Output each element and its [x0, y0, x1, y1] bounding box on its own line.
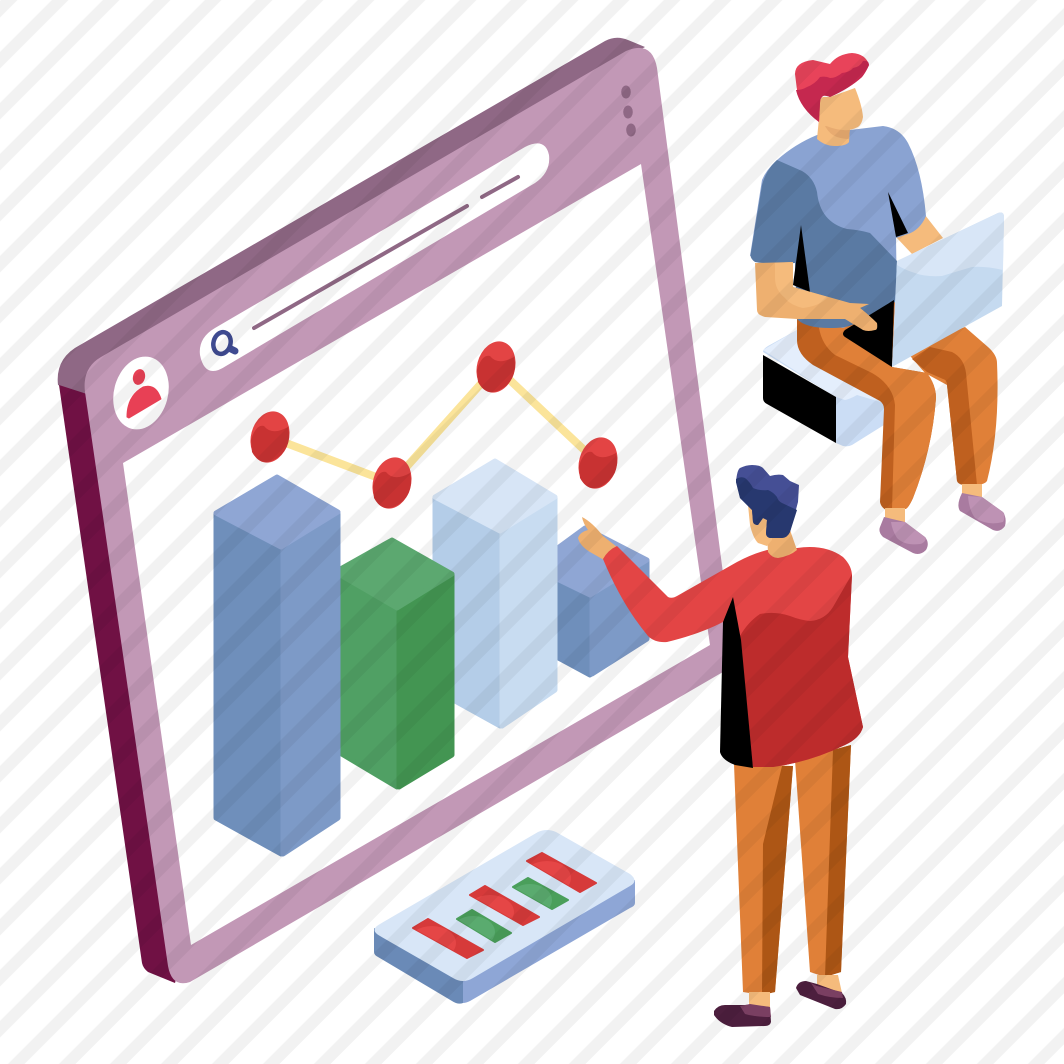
laptop screen — [892, 212, 1004, 367]
front shoe — [879, 517, 928, 554]
device left side — [374, 928, 463, 1004]
standing man pointing — [578, 465, 863, 1027]
window front frame — [85, 48, 735, 983]
data point 3 — [471, 337, 521, 397]
bar 3 — [435, 461, 555, 726]
right leg — [795, 745, 851, 977]
near arm — [755, 262, 877, 331]
sweater shade — [740, 574, 863, 767]
search bar — [200, 143, 549, 371]
window left depth — [59, 385, 178, 983]
laptop hand over keyboard — [850, 308, 877, 331]
front sock — [885, 508, 905, 526]
seated man with laptop — [750, 53, 1006, 554]
right shoe — [796, 981, 846, 1009]
seat cube — [763, 330, 890, 446]
neck — [767, 530, 797, 558]
hair — [736, 465, 799, 538]
bar 2 — [335, 540, 452, 787]
data point 2 — [367, 453, 417, 513]
left leg — [734, 764, 793, 995]
socks — [749, 975, 842, 1008]
back shoe — [958, 493, 1006, 531]
sweater black fold — [720, 597, 753, 768]
neck — [817, 118, 850, 146]
bar 4 — [553, 528, 647, 675]
left shoe — [714, 1005, 771, 1027]
device key bars — [408, 853, 596, 960]
back leg — [905, 327, 1006, 531]
window top depth — [58, 38, 645, 396]
icon: user avatar — [105, 350, 177, 436]
torso tee shirt — [750, 126, 926, 328]
face — [819, 88, 863, 130]
keyboard device — [374, 830, 635, 1004]
window content area — [123, 164, 710, 945]
browser window — [58, 38, 735, 983]
laptop keyboard shadow — [843, 300, 894, 367]
face — [748, 505, 772, 546]
bar chart — [216, 461, 647, 854]
line chart — [245, 337, 623, 513]
pointing hand — [578, 517, 617, 560]
window menu dots — [621, 86, 636, 136]
bar 1 — [216, 477, 338, 854]
back sock — [962, 484, 982, 500]
laptop — [843, 212, 1004, 367]
legs — [714, 745, 851, 1027]
data point 1 — [245, 407, 295, 467]
icon: magnifier — [211, 330, 235, 356]
device top — [374, 830, 634, 981]
trend line — [270, 367, 598, 483]
hair — [795, 53, 869, 122]
device right side — [463, 880, 635, 1003]
shirt shadow right — [888, 192, 908, 237]
red sweater — [603, 546, 863, 768]
shirt shadow left — [793, 225, 810, 292]
far forearm — [896, 215, 943, 254]
front leg — [797, 300, 936, 554]
search text line — [254, 177, 518, 328]
data point 4 — [573, 433, 623, 493]
